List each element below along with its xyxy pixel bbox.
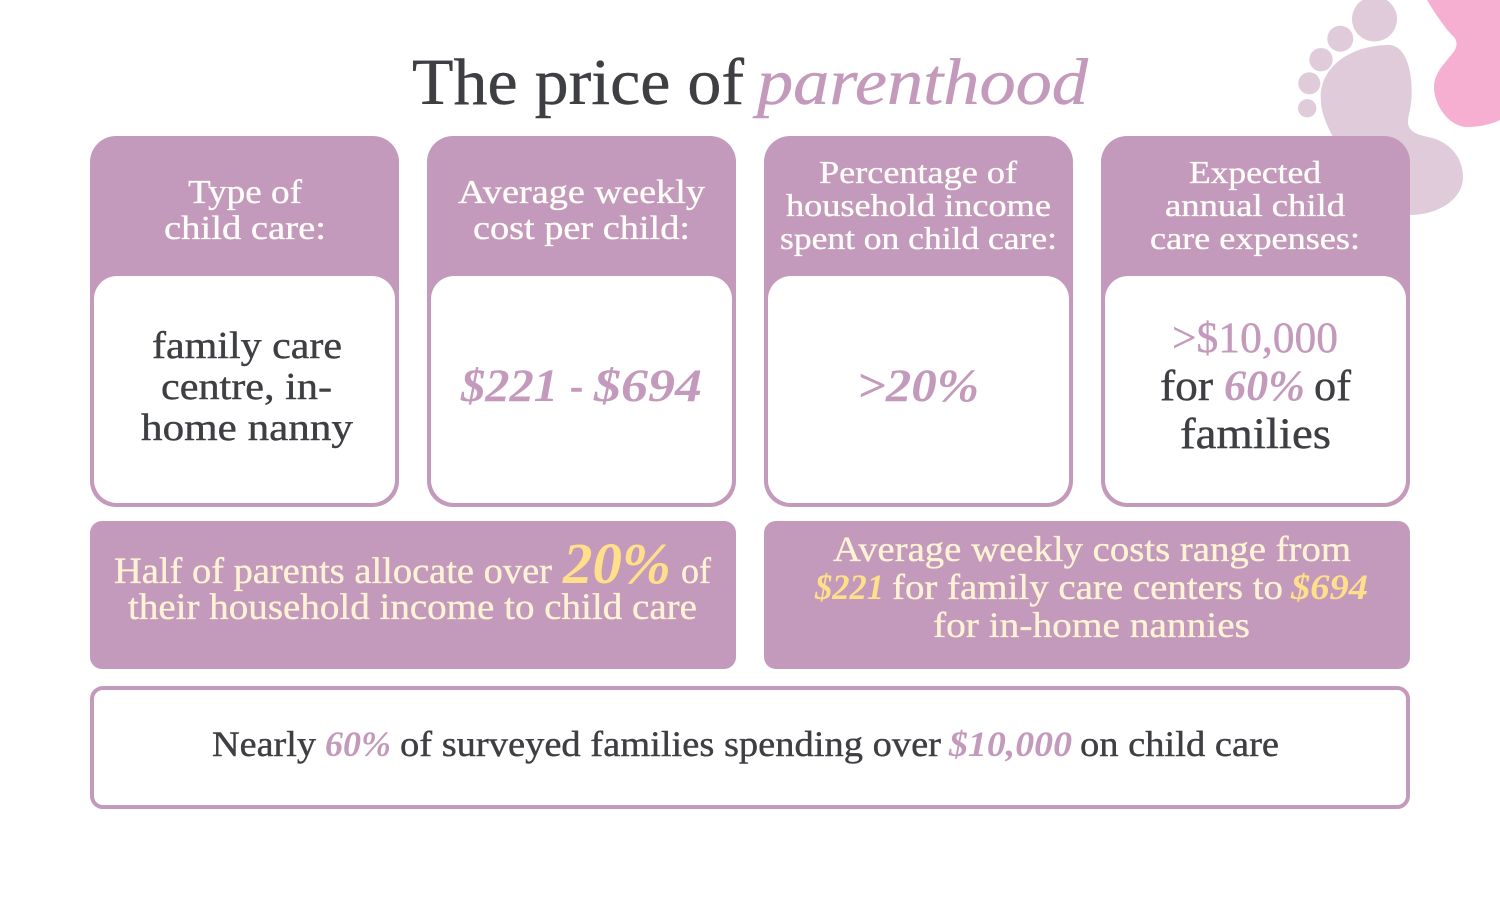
heading: annual expenses: care expenses: <box>1150 220 1360 256</box>
text: surveyed families: 60% <box>325 724 391 764</box>
heading: average weekly cost <box>458 174 705 247</box>
heading: type of child care: child care: <box>164 210 326 247</box>
title <box>412 46 1089 119</box>
text: care types: centre, in- <box>161 366 332 408</box>
text: surveyed families: Nearly <box>212 724 316 764</box>
text: weekly cost range: $221 <box>814 567 884 607</box>
value: expenses <box>1160 315 1352 458</box>
value: cost range: $694 <box>593 360 702 412</box>
text: half of parents: their household income to child care <box>128 587 697 628</box>
value: cost range <box>460 360 702 412</box>
text: weekly cost range: for in-home nannies <box>933 605 1250 645</box>
text: care types: home nanny <box>141 407 353 449</box>
heading: type of child care <box>164 174 326 247</box>
text: care types <box>141 325 353 449</box>
text: half of parents: of <box>681 551 712 592</box>
heading: percentage of income <box>780 154 1057 256</box>
icon: footprint <box>1298 0 1463 215</box>
panel: surveyed families <box>92 688 1408 807</box>
value: expenses: of <box>1314 363 1352 410</box>
text: half of parents: Half of parents allocate over <box>114 551 552 592</box>
value: expenses: 60% <box>1224 363 1305 410</box>
value: expenses: >$10,000 <box>1172 315 1338 362</box>
title: The price of <box>412 46 744 119</box>
panel: type of child care <box>90 136 399 507</box>
text: care types: family care <box>152 325 342 367</box>
panel: average weekly cost <box>427 136 736 507</box>
heading: annual expenses: Expected <box>1189 154 1321 190</box>
text: weekly cost range <box>814 529 1368 645</box>
text: weekly cost range: for family care centers to <box>892 567 1283 607</box>
text: surveyed families <box>212 724 1279 764</box>
heading: annual expenses: annual child <box>1165 187 1345 223</box>
heading: percentage of income: household income <box>786 187 1051 223</box>
decorative pink blob <box>1427 0 1500 127</box>
value: percentage: >20% <box>857 360 979 412</box>
text: surveyed families: $10,000 <box>948 724 1072 764</box>
heading: percentage of income: Percentage of <box>819 154 1017 190</box>
heading: type of child care: Type of <box>188 174 303 211</box>
heading: percentage of income: spent on child care: <box>780 220 1057 256</box>
text: half of parents <box>114 531 712 628</box>
value: cost range: $221 <box>460 360 558 412</box>
panel: percentage of income <box>764 136 1073 507</box>
title: parenthood <box>753 46 1089 119</box>
value: expenses: families <box>1180 411 1331 458</box>
text: weekly cost range: $694 <box>1290 567 1368 607</box>
banner: half of parents <box>90 521 736 669</box>
value: cost range: - <box>570 360 583 412</box>
text: surveyed families: of surveyed families spending over <box>400 724 941 764</box>
heading: average weekly cost: Average weekly <box>458 174 705 211</box>
text: surveyed families: on child care <box>1080 724 1279 764</box>
heading: average weekly cost: cost per child: <box>473 210 690 247</box>
text: half of parents: 20% <box>562 531 671 596</box>
value: expenses: for <box>1160 363 1213 410</box>
text: weekly cost range: Average weekly costs range from <box>833 529 1351 569</box>
banner: weekly cost range <box>764 521 1410 669</box>
heading: annual expenses <box>1150 154 1360 256</box>
panel: annual expenses <box>1101 136 1410 507</box>
